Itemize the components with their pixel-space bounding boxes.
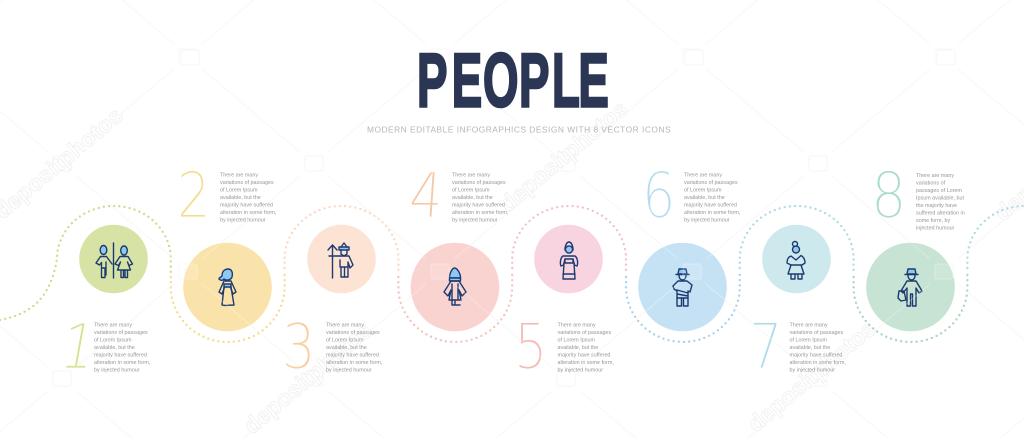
- description 4: available, but the: [452, 195, 493, 201]
- description 5: There are many: [558, 322, 596, 328]
- description 8: There are many: [916, 173, 954, 179]
- step 6: [638, 160, 741, 331]
- description 3: of Lorem Ipsum: [326, 338, 364, 344]
- circle 5: [534, 225, 603, 293]
- description 1: majority have suffered: [94, 352, 147, 358]
- description 4: of Lorem Ipsum: [452, 188, 490, 194]
- description 5: of Lorem Ipsum: [558, 338, 595, 344]
- watermark text: depositphotos: [495, 95, 633, 217]
- description 3: variations of passages: [326, 330, 380, 336]
- description 8: suffered alteration in: [916, 210, 965, 216]
- step 2: [177, 160, 277, 331]
- numeral 1: 1: [55, 310, 102, 383]
- description 4: by injected humour: [452, 218, 498, 224]
- description 6: of Lorem Ipsum: [684, 188, 722, 194]
- numeral 2: 2: [177, 160, 211, 232]
- description 3: alteration in some form,: [326, 360, 383, 366]
- description 8: injected humour: [916, 226, 955, 232]
- description 8: Ipsum available, but: [916, 196, 964, 202]
- description 3: by injected humour: [326, 368, 372, 374]
- description 4: alteration in some form,: [452, 210, 509, 216]
- numeral 4: 4: [407, 160, 446, 232]
- icon: woman in gown: [219, 269, 236, 305]
- description 2: variations of passages: [220, 180, 274, 186]
- numeral 6: 6: [642, 160, 676, 232]
- description 2: There are many: [220, 172, 258, 178]
- description 1: by injected humour: [94, 368, 140, 374]
- step 8: [866, 159, 965, 331]
- description 1: variations of passages: [94, 330, 148, 336]
- description 8: the majority have: [916, 203, 957, 209]
- description 5: variations of passages: [558, 330, 611, 336]
- description 6: by injected humour: [684, 218, 730, 224]
- description 6: variations of passages: [684, 180, 738, 186]
- description 2: by injected humour: [220, 218, 266, 224]
- description 7: There are many: [790, 322, 828, 328]
- step 4: [407, 160, 509, 331]
- circle 4: [411, 243, 499, 331]
- circle 2: [183, 243, 272, 331]
- description 1: of Lorem Ipsum: [94, 338, 132, 344]
- numeral 3: 3: [282, 311, 316, 383]
- icon: guard with spear: [328, 243, 353, 278]
- watermark text: depositphotos: [743, 315, 881, 437]
- circle 8: [866, 243, 955, 331]
- description 8: variations of: [916, 180, 946, 186]
- description 4: There are many: [452, 172, 490, 178]
- circle 3: [307, 225, 376, 293]
- description 5: available, but the: [558, 345, 598, 351]
- icon: old woman with shawl: [787, 242, 805, 279]
- circle 6: [638, 243, 727, 331]
- description 3: majority have suffered: [326, 352, 379, 358]
- watermark text: [0, 95, 1024, 439]
- description 1: available, but the: [94, 345, 135, 351]
- title: PEOPLE: [417, 39, 609, 123]
- description 5: majority have suffered: [558, 352, 610, 358]
- subtitle: MODERN EDITABLE INFOGRAPHICS DESIGN WITH 8 VECTOR ICONS: [367, 124, 671, 134]
- description 6: There are many: [684, 172, 722, 178]
- description 4: variations of passages: [452, 180, 506, 186]
- description 1: There are many: [94, 322, 132, 328]
- description 3: available, but the: [326, 345, 367, 351]
- description 7: majority have suffered: [790, 352, 842, 358]
- description 5: by injected humour: [558, 368, 603, 374]
- description 7: by injected humour: [790, 368, 835, 374]
- description 1: alteration in some form,: [94, 360, 151, 366]
- description 4: majority have suffered: [452, 202, 505, 208]
- icon: man with hat and bag: [898, 269, 922, 306]
- icon: hooded figure: [444, 268, 466, 305]
- description 2: majority have suffered: [220, 202, 273, 208]
- description 2: of Lorem Ipsum: [220, 188, 258, 194]
- dotted timeline: [0, 206, 1024, 342]
- icon: man with hat: [673, 269, 692, 306]
- description 7: of Lorem Ipsum: [790, 338, 827, 344]
- description 5: alteration in some form,: [558, 360, 614, 366]
- description 2: alteration in some form,: [220, 210, 277, 216]
- description 8: passages of Lorem: [916, 188, 962, 194]
- description 7: available, but the: [790, 345, 830, 351]
- numeral 5: 5: [514, 311, 548, 383]
- description 7: variations of passages: [790, 330, 843, 336]
- description 7: alteration in some form,: [790, 360, 846, 366]
- step 5: [514, 225, 614, 383]
- step 3: [282, 225, 383, 383]
- numeral 7: 7: [749, 311, 783, 383]
- description 6: majority have suffered: [684, 202, 737, 208]
- numeral 8: 8: [871, 159, 907, 232]
- description 6: available, but the: [684, 195, 725, 201]
- step 7: [749, 225, 846, 383]
- step 1: [55, 225, 151, 383]
- icon: man and woman: [96, 243, 132, 278]
- description 6: alteration in some form,: [684, 210, 741, 216]
- circle 1: [79, 225, 148, 293]
- description 2: available, but the: [220, 195, 261, 201]
- icon: woman in apron dress: [560, 242, 578, 279]
- watermark text: depositphotos: [239, 317, 377, 439]
- description 8: some form, by: [916, 218, 950, 224]
- description 3: There are many: [326, 322, 364, 328]
- circle 7: [762, 225, 831, 293]
